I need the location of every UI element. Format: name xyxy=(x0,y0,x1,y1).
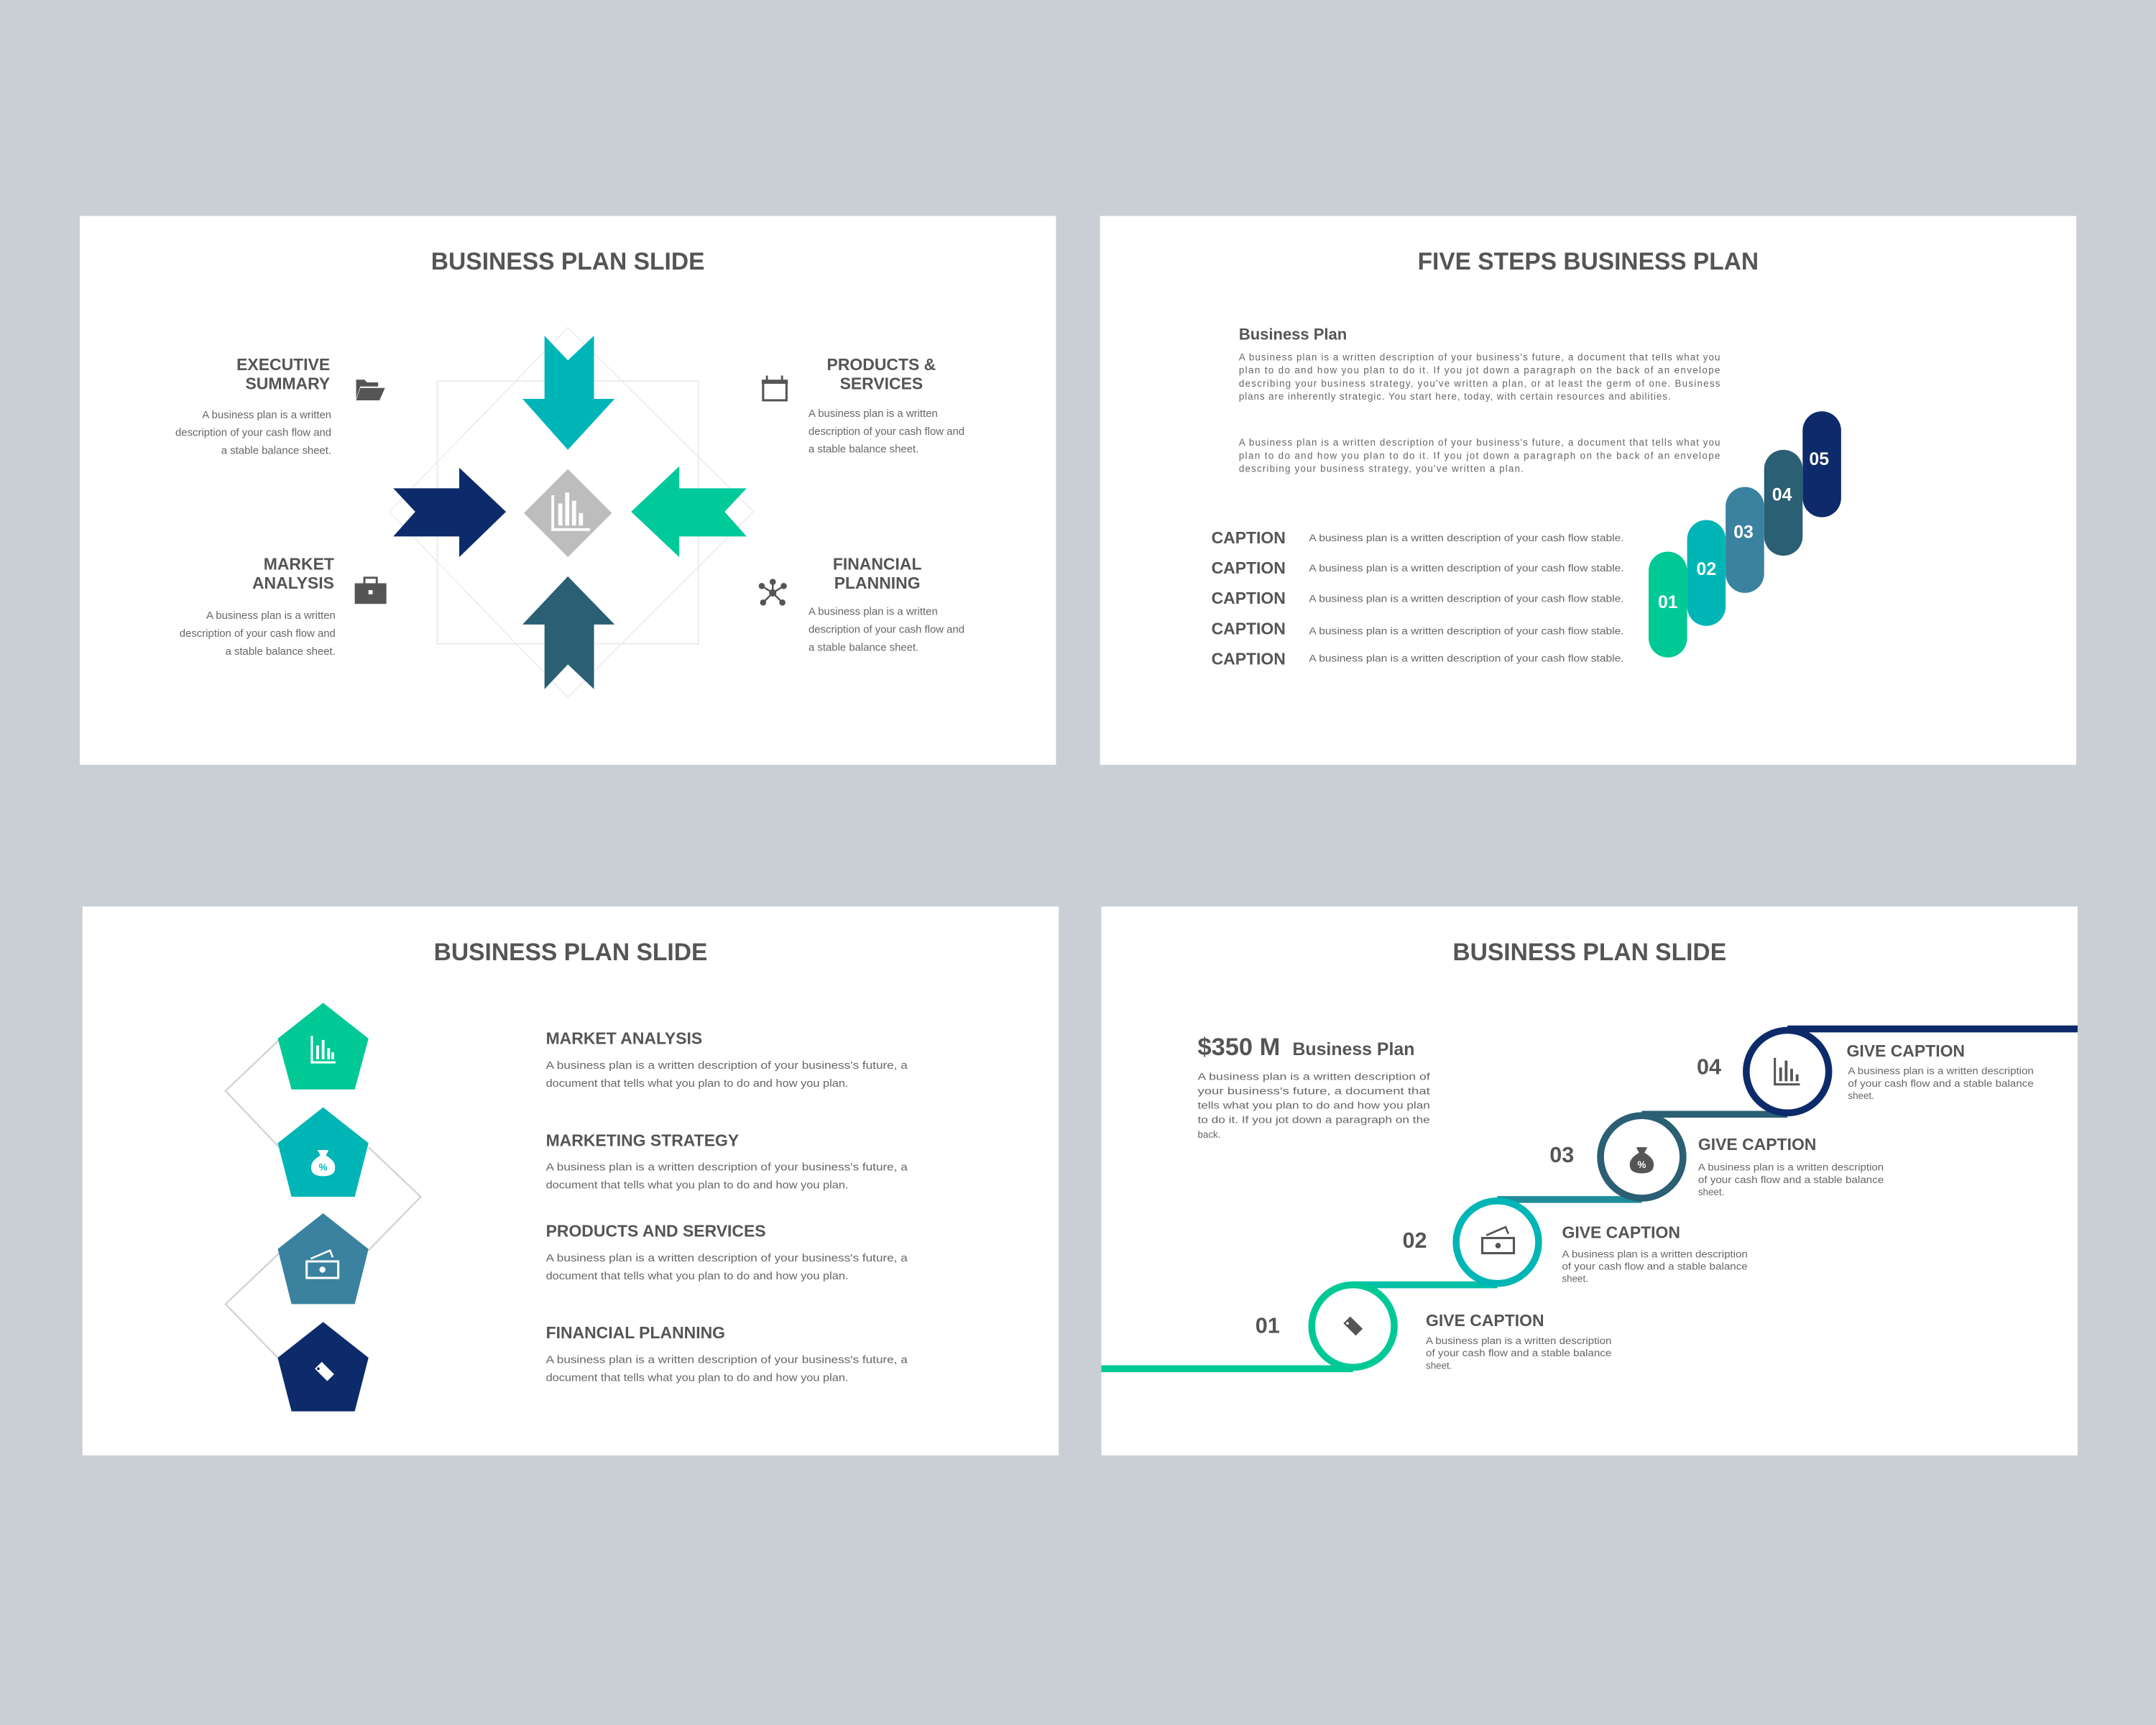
text blocks: A business plan is a written description of your business's future, a xyxy=(546,1059,908,1072)
step pills xyxy=(1649,411,1841,658)
text block: financial planning: a stable balance sheet. xyxy=(808,641,918,653)
arrow: top down xyxy=(522,336,614,450)
text block: business plan: plan to do and how you plan to do it. If you jot down a paragraph on the back of an envelope xyxy=(1239,450,1720,461)
text block: market analysis: description of your cash flow and xyxy=(180,627,336,640)
caption list: A business plan is a written description of your cash flow stable. xyxy=(1309,563,1624,574)
icon: network xyxy=(760,580,786,604)
caption list xyxy=(1212,528,1624,668)
text blocks: A business plan is a written description of your business's future, a xyxy=(546,1252,908,1264)
icon: money bag: % xyxy=(1637,1159,1646,1170)
arrow: left pointing right xyxy=(393,468,506,557)
text blocks: FINANCIAL PLANNING xyxy=(546,1323,725,1342)
step pills: 04 xyxy=(1772,485,1792,505)
caption list: CAPTION xyxy=(1212,589,1286,607)
icon: pentagon money bag xyxy=(277,1108,369,1197)
text block: $350 M: Business Plan xyxy=(1292,1039,1414,1059)
step pills: 05 xyxy=(1809,449,1829,469)
captions: sheet. xyxy=(1848,1090,1874,1101)
arrow: right pointing left xyxy=(631,466,747,557)
captions: A business plan is a written description xyxy=(1562,1248,1748,1259)
text block: financial planning xyxy=(808,554,964,653)
text blocks: PRODUCTS AND SERVICES xyxy=(546,1222,766,1241)
icon: pentagon tag xyxy=(277,1322,369,1412)
text block: executive summary: A business plan is a written xyxy=(202,409,331,421)
step pills: 01 xyxy=(1658,592,1678,612)
icon: calendar xyxy=(762,375,788,400)
icon: pentagon cash xyxy=(277,1213,369,1304)
text block: business plan xyxy=(1239,326,1720,474)
caption list: A business plan is a written description of your cash flow stable. xyxy=(1309,533,1624,543)
captions: of your cash flow and a stable balance xyxy=(1426,1348,1611,1358)
text block: products & services: description of your cash flow and xyxy=(808,426,964,438)
icon: folder xyxy=(356,380,385,400)
text block: $350 M: to do it. If you jot down a paragraph on the xyxy=(1197,1115,1430,1126)
icon: pentagon money bag: % xyxy=(319,1162,328,1173)
captions: GIVE CAPTION xyxy=(1562,1223,1680,1241)
text block: $350 M: tells what you plan to do and how you plan xyxy=(1197,1100,1430,1111)
text block: $350 M: back. xyxy=(1197,1129,1220,1140)
caption list: CAPTION xyxy=(1212,528,1286,547)
text block: financial planning: PLANNING xyxy=(834,574,921,592)
icon: tag xyxy=(1343,1317,1363,1335)
caption list: A business plan is a written description of your cash flow stable. xyxy=(1309,625,1624,636)
step pills: 03 xyxy=(1733,522,1754,542)
icon: chart xyxy=(1774,1058,1800,1085)
text block: products & services: PRODUCTS & xyxy=(827,355,936,374)
text blocks: document that tells what you plan to do and how you plan. xyxy=(546,1270,848,1282)
title: BUSINESS PLAN SLIDE xyxy=(431,248,705,275)
icon: center chart diamond xyxy=(524,469,612,557)
caption list: CAPTION xyxy=(1212,619,1286,638)
icon: money bag xyxy=(1630,1147,1654,1174)
caption list: A business plan is a written description of your cash flow stable. xyxy=(1309,593,1624,604)
captions: A business plan is a written description xyxy=(1848,1066,2034,1077)
text block: market analysis: MARKET xyxy=(264,554,334,573)
step numbers: 01 xyxy=(1256,1314,1280,1338)
step numbers: 04 xyxy=(1697,1055,1721,1080)
step pills: 02 xyxy=(1697,559,1716,579)
text blocks: MARKETING STRATEGY xyxy=(546,1131,739,1149)
text block: $350 M: $350 M xyxy=(1197,1034,1280,1061)
text block: $350 M xyxy=(1197,1034,1430,1140)
caption list: CAPTION xyxy=(1212,649,1286,668)
text block: business plan: A business plan is a written description of your business's future, a document that tells what you xyxy=(1239,351,1720,362)
text block: financial planning: FINANCIAL xyxy=(833,554,921,573)
captions: GIVE CAPTION xyxy=(1426,1311,1544,1330)
text block: market analysis xyxy=(180,554,336,658)
title: FIVE STEPS BUSINESS PLAN xyxy=(1418,248,1759,275)
text blocks: document that tells what you plan to do and how you plan. xyxy=(546,1077,848,1090)
panel: business plan slide arrows xyxy=(80,216,1056,765)
title: BUSINESS PLAN SLIDE xyxy=(1452,939,1726,966)
text block: products & services: SERVICES xyxy=(840,374,923,393)
captions: A business plan is a written description xyxy=(1426,1335,1611,1346)
text block: $350 M: A business plan is a written description of xyxy=(1197,1071,1430,1082)
panel: stair steps xyxy=(1102,906,2078,1455)
text block: executive summary xyxy=(175,355,331,457)
text block: $350 M: your business's future, a document that xyxy=(1197,1085,1430,1096)
step numbers: 03 xyxy=(1549,1143,1574,1167)
text block: business plan: Business Plan xyxy=(1239,326,1347,344)
text block: business plan: A business plan is a written description of your business's future, a document that tells what you xyxy=(1239,437,1720,448)
captions: A business plan is a written description xyxy=(1698,1162,1884,1173)
captions: of your cash flow and a stable balance xyxy=(1698,1174,1884,1185)
text block: products & services: A business plan is a written xyxy=(808,408,938,420)
caption list: A business plan is a written description of your cash flow stable. xyxy=(1309,653,1624,664)
text block: business plan: plans are inherently strategic. You start here, today, with certain resources and abilities. xyxy=(1239,391,1671,402)
captions xyxy=(1426,1041,2034,1371)
text blocks: document that tells what you plan to do and how you plan. xyxy=(546,1372,848,1384)
text block: executive summary: description of your cash flow and xyxy=(175,427,331,439)
arrow: bottom up xyxy=(522,576,614,689)
captions: GIVE CAPTION xyxy=(1847,1041,1965,1060)
text block: business plan: describing your business strategy, you've written a plan. xyxy=(1239,463,1524,474)
text block: financial planning: A business plan is a written xyxy=(808,606,938,618)
text block: market analysis: A business plan is a written xyxy=(206,610,336,622)
text block: business plan: describing your business strategy, you've written a plan, or at least the germ of one. Business xyxy=(1239,378,1720,389)
captions: of your cash flow and a stable balance xyxy=(1562,1261,1748,1272)
step numbers xyxy=(1256,1055,1721,1338)
icon: cash xyxy=(1482,1227,1514,1254)
panel: five steps business plan xyxy=(1100,216,2076,765)
stair path xyxy=(1102,1029,2078,1368)
icon: briefcase xyxy=(355,578,387,604)
captions: GIVE CAPTION xyxy=(1698,1135,1816,1154)
captions: sheet. xyxy=(1698,1187,1724,1197)
text block: products & services: a stable balance sheet. xyxy=(808,443,918,456)
caption list: CAPTION xyxy=(1212,558,1286,577)
text blocks xyxy=(546,1029,908,1384)
panel: pentagon list xyxy=(83,906,1059,1455)
text block: executive summary: a stable balance sheet. xyxy=(221,445,331,457)
text block: business plan: plan to do and how you plan to do it. If you jot down a paragraph on the back of an envelope xyxy=(1239,365,1720,376)
text blocks: document that tells what you plan to do and how you plan. xyxy=(546,1179,848,1192)
text block: executive summary: SUMMARY xyxy=(245,374,330,393)
captions: sheet. xyxy=(1562,1274,1588,1284)
text blocks: A business plan is a written description of your business's future, a xyxy=(546,1162,908,1174)
text block: market analysis: ANALYSIS xyxy=(252,574,334,592)
title: BUSINESS PLAN SLIDE xyxy=(434,939,707,966)
text block: executive summary: EXECUTIVE xyxy=(236,355,330,374)
icon: pentagon chart xyxy=(277,1003,369,1090)
captions: of your cash flow and a stable balance xyxy=(1848,1078,2034,1089)
text block: products & services xyxy=(808,355,964,456)
step numbers: 02 xyxy=(1403,1228,1427,1253)
text block: market analysis: a stable balance sheet. xyxy=(226,645,336,658)
text blocks: A business plan is a written description of your business's future, a xyxy=(546,1354,908,1366)
text blocks: MARKET ANALYSIS xyxy=(546,1029,702,1048)
text block: financial planning: description of your cash flow and xyxy=(808,623,964,635)
captions: sheet. xyxy=(1426,1360,1452,1371)
